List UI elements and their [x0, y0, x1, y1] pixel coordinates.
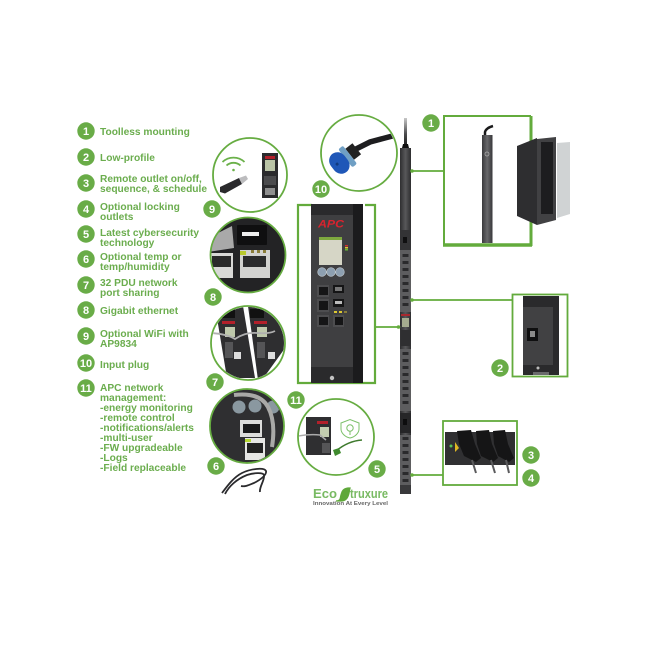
badge 9: 9	[209, 204, 215, 216]
item 10: input plug	[77, 354, 149, 372]
badge 11	[287, 391, 305, 409]
item 11: network management	[77, 379, 194, 474]
item 1: toolless mounting	[77, 122, 190, 140]
item 4: locking outlets: 4	[83, 204, 90, 216]
callout frame 2: low-profile	[411, 294, 568, 376]
item 5: cybersecurity	[77, 225, 199, 249]
item 11: network management: 11	[80, 383, 92, 395]
item 3: remote outlet control	[77, 174, 207, 195]
item 11: network management: -FW upgradeable	[100, 443, 183, 454]
connector	[376, 326, 398, 328]
badge 5	[368, 460, 386, 478]
item 10: input plug: 10	[80, 358, 92, 370]
callout frame 3-4: locking outlets	[411, 421, 517, 485]
callout 7: port sharing	[211, 306, 288, 380]
item 3: remote outlet control: 3	[83, 178, 89, 190]
item 4: locking outlets	[77, 200, 180, 223]
item 7: network port sharing: 32 PDU network	[100, 278, 178, 289]
item 1: toolless mounting: Toolless mounting	[100, 127, 190, 138]
item 11: network management: -notifications/alerts	[100, 423, 194, 434]
connector	[411, 474, 443, 476]
badge 7: 7	[212, 377, 218, 389]
item 11: network management: APC network	[100, 383, 164, 394]
icon: blue plug	[329, 143, 361, 174]
badge 10: 10	[315, 184, 327, 196]
EcoStruxure logo	[313, 486, 389, 507]
item 11: network management: -multi-user	[100, 433, 153, 444]
control buttons	[318, 268, 344, 276]
item 11: network management: -energy monitoring	[100, 403, 193, 414]
icon: wifi	[222, 158, 244, 171]
item 11: network management: -Field replaceable	[100, 463, 186, 474]
device: network controller	[311, 204, 363, 383]
APC logo: APC	[317, 218, 345, 230]
EcoStruxure logo: truxure	[350, 486, 388, 501]
badge 4	[522, 469, 540, 487]
item 9: optional wifi	[77, 327, 189, 350]
connector dots	[397, 169, 414, 477]
item 7: network port sharing: port sharing	[100, 288, 159, 299]
item 5: cybersecurity: technology	[100, 238, 155, 249]
item 3: remote outlet control: sequence, & schedule	[100, 184, 207, 195]
feature list	[77, 122, 207, 474]
badge 1: 1	[428, 118, 434, 130]
item 9: optional wifi: 9	[83, 331, 89, 343]
item 8: gigabit ethernet: 8	[83, 305, 89, 317]
item 11: network management: -remote control	[100, 413, 175, 424]
connector	[411, 299, 512, 301]
power cord	[404, 118, 407, 145]
item 2: low-profile: 2	[83, 152, 89, 164]
item 1: toolless mounting: 1	[83, 126, 89, 138]
item 2: low-profile	[77, 148, 155, 166]
item 6: temp/humidity	[77, 250, 182, 273]
badge 2: 2	[497, 363, 503, 375]
server rack	[517, 137, 570, 225]
breaker section	[523, 296, 559, 375]
status leds	[345, 245, 348, 250]
lcd screen	[319, 237, 342, 265]
badge 10	[312, 180, 330, 198]
item 10: input plug: Input plug	[100, 360, 149, 371]
badge 6: 6	[213, 461, 219, 473]
callout 10: input plug	[321, 115, 397, 191]
badge 9	[203, 200, 221, 218]
EcoStruxure logo: Innovation At Every Level	[313, 501, 389, 507]
item 9: optional wifi: Optional WiFi with	[100, 329, 189, 340]
callout 5: cybersecurity	[298, 399, 374, 475]
item 3: remote outlet control: Remote outlet on/off,	[100, 174, 202, 185]
rack PDU strip	[397, 118, 414, 494]
badge 1	[422, 114, 440, 132]
badge 5: 5	[374, 464, 380, 476]
ethernet cable	[222, 469, 266, 494]
network ports	[317, 285, 347, 327]
item 4: locking outlets: outlets	[100, 212, 134, 223]
item 7: network port sharing	[77, 276, 178, 299]
callout 6: temp sensor port	[210, 389, 284, 463]
cord	[356, 135, 396, 149]
icon: usb dongle	[220, 176, 248, 194]
PDU mounting bar	[482, 126, 493, 243]
outlets	[402, 254, 408, 482]
badge 6	[207, 457, 225, 475]
item 8: gigabit ethernet	[77, 301, 179, 319]
icon: security shield	[341, 420, 359, 438]
badge 3: 3	[528, 450, 534, 462]
item 8: gigabit ethernet: Gigabit ethernet	[100, 306, 179, 317]
badge 2	[491, 359, 509, 377]
item 6: temp/humidity: Optional temp or	[100, 252, 182, 263]
badge 11: 11	[290, 395, 302, 407]
locking plugs	[445, 430, 515, 473]
item 9: optional wifi: AP9834	[100, 339, 137, 350]
badge 4: 4	[528, 473, 535, 485]
item 11: network management: management:	[100, 393, 166, 404]
badge 8: 8	[210, 292, 216, 304]
item 6: temp/humidity: temp/humidity	[100, 262, 170, 273]
item 5: cybersecurity: Latest cybersecurity	[100, 228, 199, 239]
item 2: low-profile: Low-profile	[100, 153, 155, 164]
item 7: network port sharing: 7	[83, 280, 89, 292]
connector	[411, 170, 443, 172]
callout 8: gigabit ports	[206, 217, 286, 293]
callout 9: wifi adapter	[213, 138, 287, 212]
EcoStruxure logo: Eco	[313, 486, 337, 501]
logo S mark	[336, 488, 350, 501]
badge 7	[206, 373, 224, 391]
item 6: temp/humidity: 6	[83, 254, 89, 266]
callout frame 1: toolless mounting	[411, 116, 570, 246]
item 5: cybersecurity: 5	[83, 229, 89, 241]
item 4: locking outlets: Optional locking	[100, 202, 180, 213]
badge 3	[522, 446, 540, 464]
mini network card	[262, 153, 278, 198]
item 11: network management: -Logs	[100, 453, 128, 464]
badge 8	[204, 288, 222, 306]
front panel frame 10	[298, 204, 398, 383]
